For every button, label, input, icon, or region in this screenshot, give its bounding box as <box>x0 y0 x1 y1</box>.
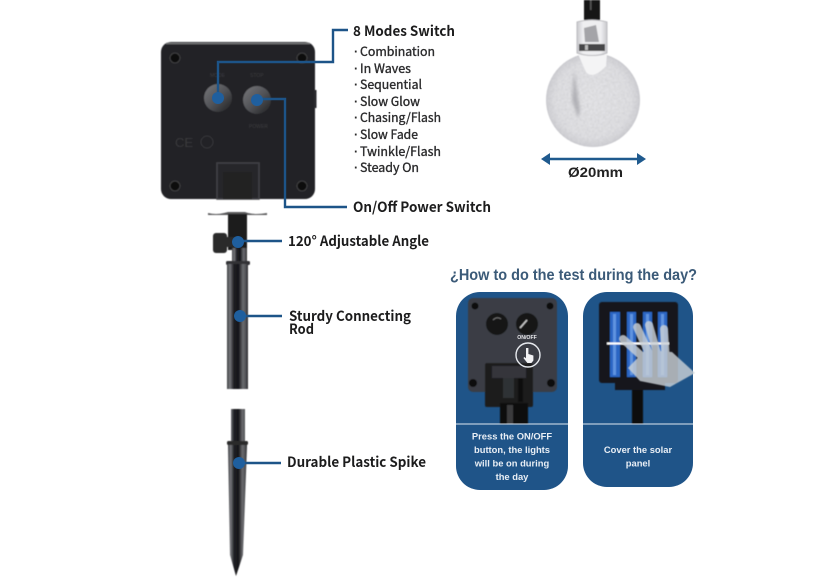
bulb <box>546 0 640 147</box>
heading: on/off power switch: On/Off Power Switch <box>353 197 491 217</box>
list: modes: Sequential <box>360 74 422 93</box>
list: modes: · <box>354 145 358 159</box>
label: diameter: Ø20mm <box>568 165 623 180</box>
icon: covering hand <box>623 325 695 387</box>
label: adjustable angle: 120° Adjustable Angle <box>288 231 429 251</box>
leader: 8 modes switch <box>212 30 348 104</box>
device: switch box back: MODE <box>210 73 226 79</box>
list: modes: · <box>354 95 358 109</box>
label: connecting rod: Rod <box>289 319 314 339</box>
list: modes: Steady On <box>360 157 419 176</box>
list: modes: · <box>354 128 358 142</box>
infographic <box>160 0 696 576</box>
list: modes: · <box>354 111 358 125</box>
label: connecting rod <box>289 306 412 339</box>
list: modes: In Waves <box>360 58 411 77</box>
icon: solar panel <box>599 302 678 424</box>
label: connecting rod: Sturdy Connecting <box>289 306 412 326</box>
label: on/off: ON/OFF <box>517 335 537 341</box>
list: modes: · <box>354 78 358 92</box>
connecting rod <box>208 212 267 389</box>
list: modes: Slow Fade <box>360 124 418 143</box>
text: press on/off instructions: button, the lights <box>474 444 550 455</box>
device: switch box back: CE <box>175 135 193 150</box>
list: modes: Combination <box>360 41 435 60</box>
text: cover solar instructions: Cover the solar <box>604 444 672 455</box>
list: modes: Chasing/Flash <box>360 107 441 126</box>
leader: plastic spike <box>233 457 281 469</box>
text: press on/off instructions <box>472 430 552 482</box>
text: cover solar instructions <box>604 444 672 468</box>
list: modes: Slow Glow <box>360 91 420 110</box>
leader: on/off power switch <box>251 94 347 207</box>
text: press on/off instructions: the day <box>496 471 529 482</box>
device: switch box back: POWER <box>249 124 268 130</box>
label: plastic spike: Durable Plastic Spike <box>287 452 426 472</box>
list: modes <box>354 41 441 176</box>
heading: 8 modes switch: 8 Modes Switch <box>353 21 455 41</box>
heading: test during the day: ¿How to do the test during the day? <box>450 267 697 284</box>
list: modes: · <box>354 45 358 59</box>
list: modes: · <box>354 161 358 175</box>
device: switch box back: STOP <box>250 73 264 79</box>
list: modes: Twinkle/Flash <box>360 141 441 160</box>
icon: switch box front <box>468 298 557 424</box>
text: press on/off instructions: Press the ON/OFF <box>472 430 552 442</box>
panel: press on/off <box>456 292 568 490</box>
leader: adjustable angle <box>232 236 282 248</box>
panel: cover solar panel <box>583 292 695 487</box>
list: modes: · <box>354 62 358 76</box>
text: cover solar instructions: panel <box>626 458 650 468</box>
icon: tap hand <box>516 343 540 367</box>
device: switch box back <box>161 42 316 199</box>
leader: connecting rod <box>234 310 282 322</box>
text: press on/off instructions: will be on during <box>474 458 550 468</box>
plastic spike <box>227 409 248 576</box>
dimension arrow <box>541 153 646 165</box>
